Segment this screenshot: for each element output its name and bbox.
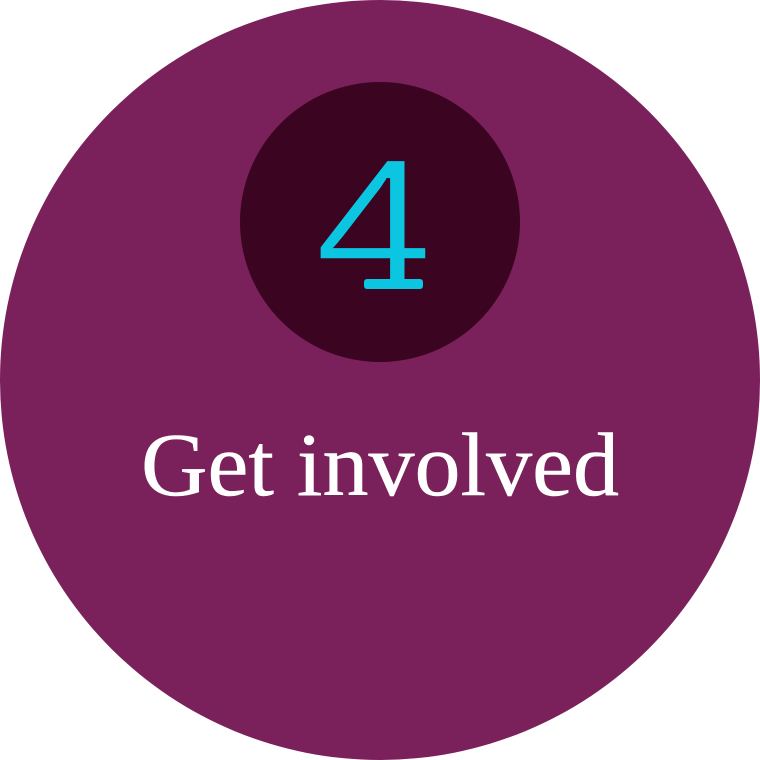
heading: Get involved: [141, 416, 619, 515]
step number: 4: [314, 119, 433, 329]
icon: dark number circle: [240, 82, 520, 362]
